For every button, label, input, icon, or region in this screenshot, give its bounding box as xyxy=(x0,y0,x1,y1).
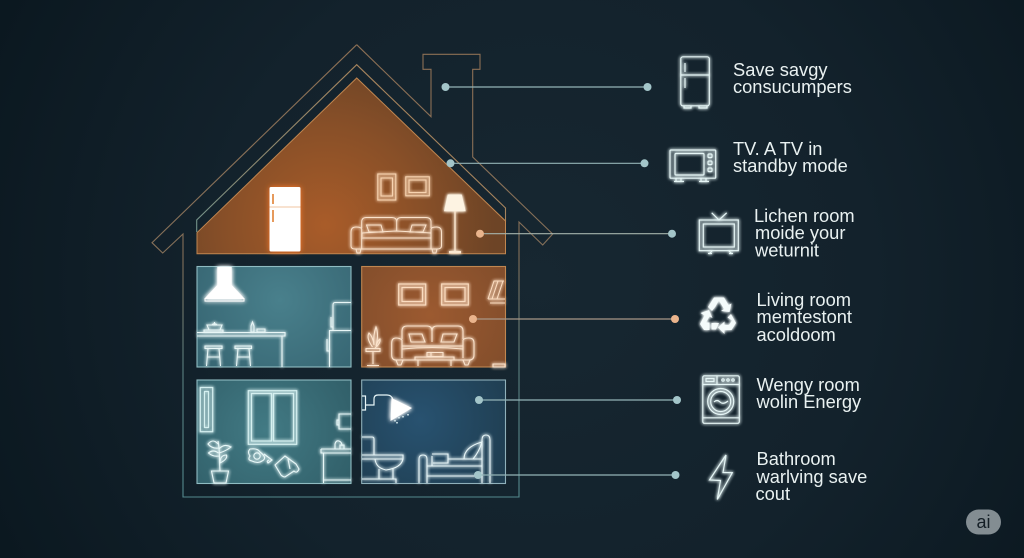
text: bolt label: Bathroom xyxy=(756,448,836,469)
icon: toilet xyxy=(362,437,403,483)
text: fridge label xyxy=(733,59,852,97)
text: recycling label: Living room xyxy=(756,289,851,310)
text: microwave label: standby mode xyxy=(733,155,848,176)
connector: tv line xyxy=(476,230,676,238)
text: bolt label xyxy=(756,448,867,504)
icon: scattered objects xyxy=(248,449,299,477)
icon: wall frames xyxy=(399,284,468,305)
text: recycling label xyxy=(756,289,852,345)
icon: lightning bolt xyxy=(710,455,732,500)
connector: bolt line xyxy=(474,471,680,479)
text: fridge label: consucumpers xyxy=(733,76,852,97)
icon: wall frames xyxy=(378,174,429,200)
panel: utility room xyxy=(197,380,351,484)
icon: windows xyxy=(200,388,297,444)
text: washing machine label xyxy=(756,374,862,412)
panel: attic room xyxy=(197,78,506,254)
panel: living room xyxy=(362,266,506,367)
panel: bathroom xyxy=(362,380,506,484)
icon: microwave xyxy=(670,150,716,182)
icon: bed xyxy=(419,435,490,483)
icon: floor lamp xyxy=(444,194,466,253)
text: television label xyxy=(754,205,855,260)
connector: washer line xyxy=(475,396,681,404)
icon: sink and cabinet xyxy=(321,414,351,483)
text: television label: moide your xyxy=(755,222,845,243)
connector: recycle line xyxy=(469,315,679,323)
connector: fridge line xyxy=(442,83,652,91)
text: washing machine label: wolin Energy xyxy=(756,391,862,412)
icon: cooker hood xyxy=(205,267,244,301)
icon: bookshelf item xyxy=(488,281,505,303)
icon: kitchen counter with stools xyxy=(197,302,351,367)
text: recycling label: acoldoom xyxy=(756,324,836,345)
icon: plant in pot xyxy=(208,441,231,483)
connector: microwave line xyxy=(446,159,648,167)
text: recycling label: memtestont xyxy=(756,306,852,327)
icon: sofa and table xyxy=(392,326,474,366)
icon: shower head xyxy=(362,395,412,424)
text: television label: Lichen room xyxy=(754,205,855,226)
house outline xyxy=(152,45,553,497)
text: television label: weturnit xyxy=(754,240,819,260)
text: microwave label: TV. A TV in xyxy=(733,138,822,159)
badge: ai watermark xyxy=(966,510,1001,534)
icon: television xyxy=(699,213,738,254)
badge: ai watermark: ai xyxy=(976,512,991,532)
text: bolt label: cout xyxy=(756,483,790,504)
icon: sofa xyxy=(351,218,442,253)
icon: glowing fridge xyxy=(270,187,300,252)
text: bolt label: warlving save xyxy=(756,466,867,487)
icon: recycling arrows xyxy=(700,298,736,334)
text: washing machine label: Wengy room xyxy=(756,374,860,395)
panel: kitchen xyxy=(197,266,351,367)
text: microwave label xyxy=(733,138,848,176)
text: fridge label: Save savgy xyxy=(733,59,828,80)
icon: washing machine xyxy=(703,376,739,423)
icon: potted plant on stand xyxy=(366,327,505,367)
icon: fridge xyxy=(681,57,709,108)
